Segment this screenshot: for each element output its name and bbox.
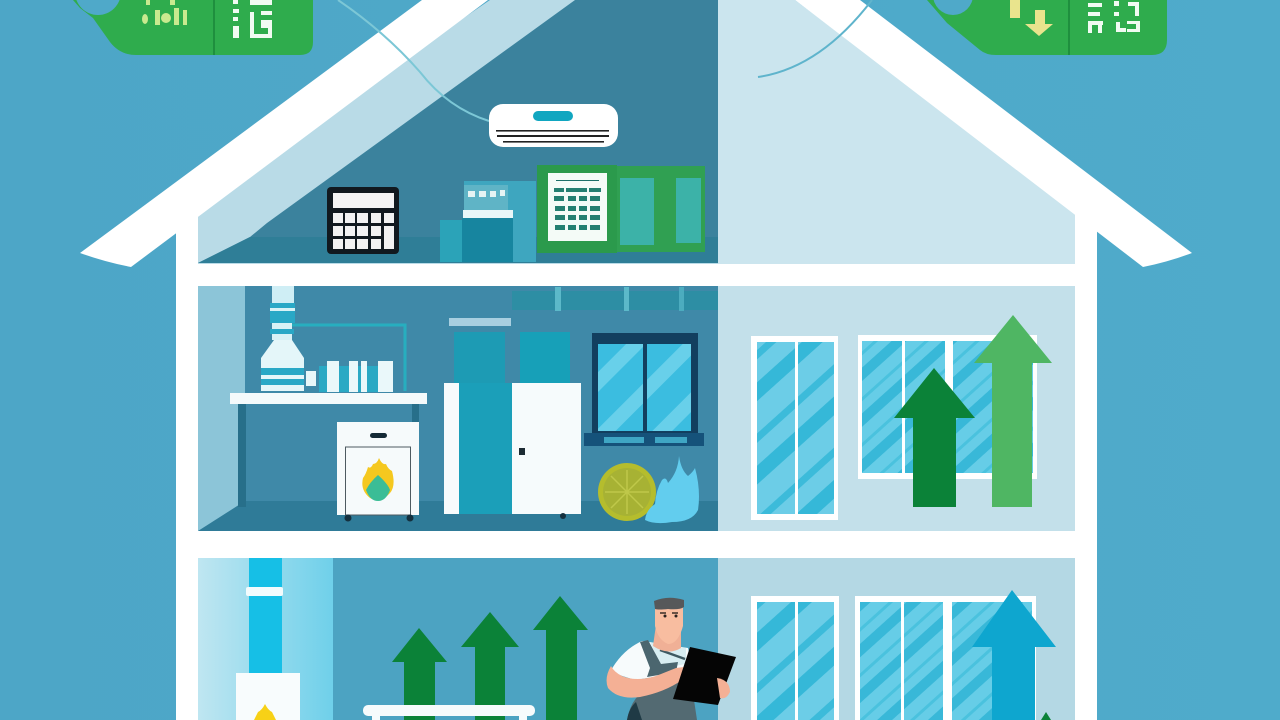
arrow: ground floor green 1 xyxy=(392,628,447,720)
house frame: walls and floors xyxy=(176,196,1097,720)
window: middle floor wide xyxy=(858,335,1037,479)
window: middle floor single xyxy=(751,336,838,520)
window: ground floor single xyxy=(751,596,839,720)
arrow: ground floor green 3 xyxy=(533,596,588,720)
tablet xyxy=(673,647,736,705)
cable: left xyxy=(338,0,489,121)
icon: citrus slice xyxy=(598,463,656,521)
table xyxy=(363,705,535,720)
icon: blue flame xyxy=(645,456,699,523)
ground floor room: left xyxy=(198,558,718,720)
price tag: right xyxy=(927,0,1167,55)
middle floor room: right xyxy=(718,286,1075,531)
top hoppers above cabinet xyxy=(449,318,570,383)
arrow: blue up xyxy=(972,590,1056,720)
furnace with flame xyxy=(337,422,419,522)
right attic room xyxy=(718,0,1075,264)
ground floor room: right xyxy=(718,558,1075,720)
icon: calculator xyxy=(327,187,399,254)
arrow: dark green up xyxy=(894,368,975,507)
arrow: ground floor green 2 xyxy=(461,612,519,720)
arrow: small green xyxy=(1041,712,1051,720)
water heater stack xyxy=(261,286,304,391)
icon: flame xyxy=(362,458,394,501)
tag code block: right xyxy=(1088,1,1140,33)
shelf xyxy=(230,393,427,507)
middle floor room: left xyxy=(198,286,718,531)
icon: boiler flame xyxy=(254,704,276,720)
panel: green document board xyxy=(537,165,705,253)
arrow: light green up xyxy=(974,315,1052,507)
worker with tablet xyxy=(607,598,736,720)
icon: up and down arrows on tag xyxy=(1010,0,1053,36)
striped tank xyxy=(306,361,393,392)
device: attic unit xyxy=(440,181,536,262)
tag code block: left xyxy=(233,0,272,38)
pipe xyxy=(285,325,405,391)
boiler column xyxy=(236,558,300,720)
cabinet xyxy=(444,383,581,519)
price tag: left xyxy=(73,0,313,55)
roof xyxy=(80,0,1192,267)
icon: air conditioner xyxy=(489,104,618,147)
left attic room xyxy=(198,0,718,264)
ceiling duct xyxy=(512,287,718,311)
tag symbols: left xyxy=(142,0,187,25)
cable: right xyxy=(758,0,872,77)
window: dark frame xyxy=(584,333,704,446)
window: ground floor wide xyxy=(855,596,1036,720)
